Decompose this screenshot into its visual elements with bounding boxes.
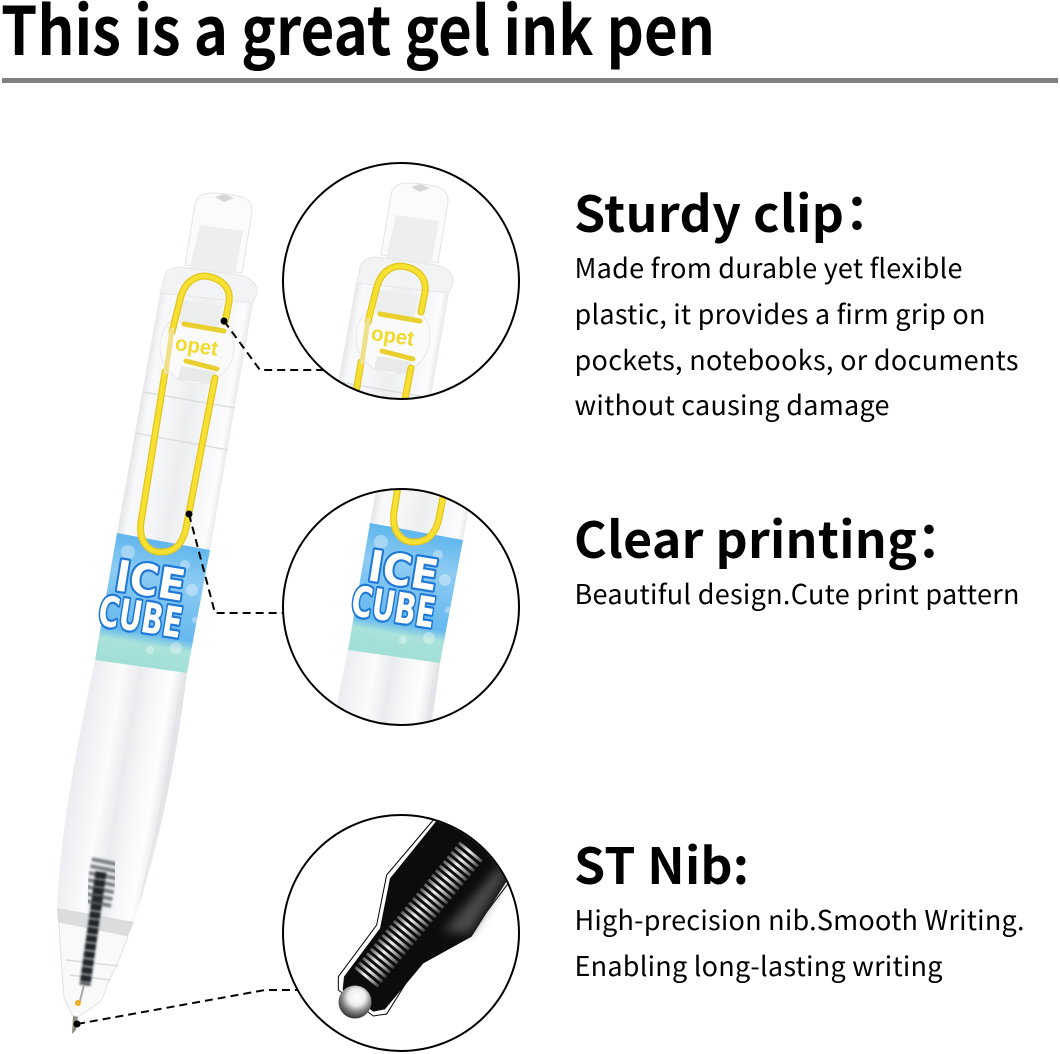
detail circle: clip: opet [370,322,415,351]
connector: print [186,510,285,613]
heading: clear printing: Clear printing [574,501,917,573]
heading: ST nib: ST Nib: [574,827,749,899]
text: ST nib description [574,899,1024,984]
text: sturdy clip description: Made from durable yet flexible [574,247,962,286]
title rule [2,78,1058,83]
heading: sturdy clip: ： [832,175,882,247]
text: ST nib description: High-precision nib.Smooth Writing. [574,899,1024,938]
detail circle: print [282,488,520,726]
detail circle: nib [283,815,523,1051]
feature: ST nib [574,827,1024,984]
text: ST nib description: Enabling long-lasting writing [574,945,942,984]
detail circle: print: CUBE [348,576,439,638]
pen label: ICE CUBE [95,550,192,648]
text: sturdy clip description: without causing damage [574,384,890,423]
connector: clip [220,318,325,370]
feature: clear printing [574,501,1020,612]
text: sturdy clip description [574,247,1018,423]
pen label: ICE CUBE: CUBE [95,586,186,648]
text: clear printing description: Beautiful design.Cute print pattern [574,573,1020,612]
heading: clear printing: ： [904,503,954,575]
feature: sturdy clip [574,175,1018,423]
pen brand: opet: opet [174,332,219,361]
detail circle: clip [282,162,520,400]
pen label: ICE CUBE: ICE [112,551,189,612]
connector: nib [74,990,298,1028]
heading: sturdy clip: Sturdy clip [574,175,844,247]
pen illustration [57,193,257,1034]
text: sturdy clip description: pockets, notebooks, or documents [574,339,1018,378]
detail circle: print: ICE [365,541,442,602]
text: sturdy clip description: plastic, it provides a firm grip on [574,293,986,332]
